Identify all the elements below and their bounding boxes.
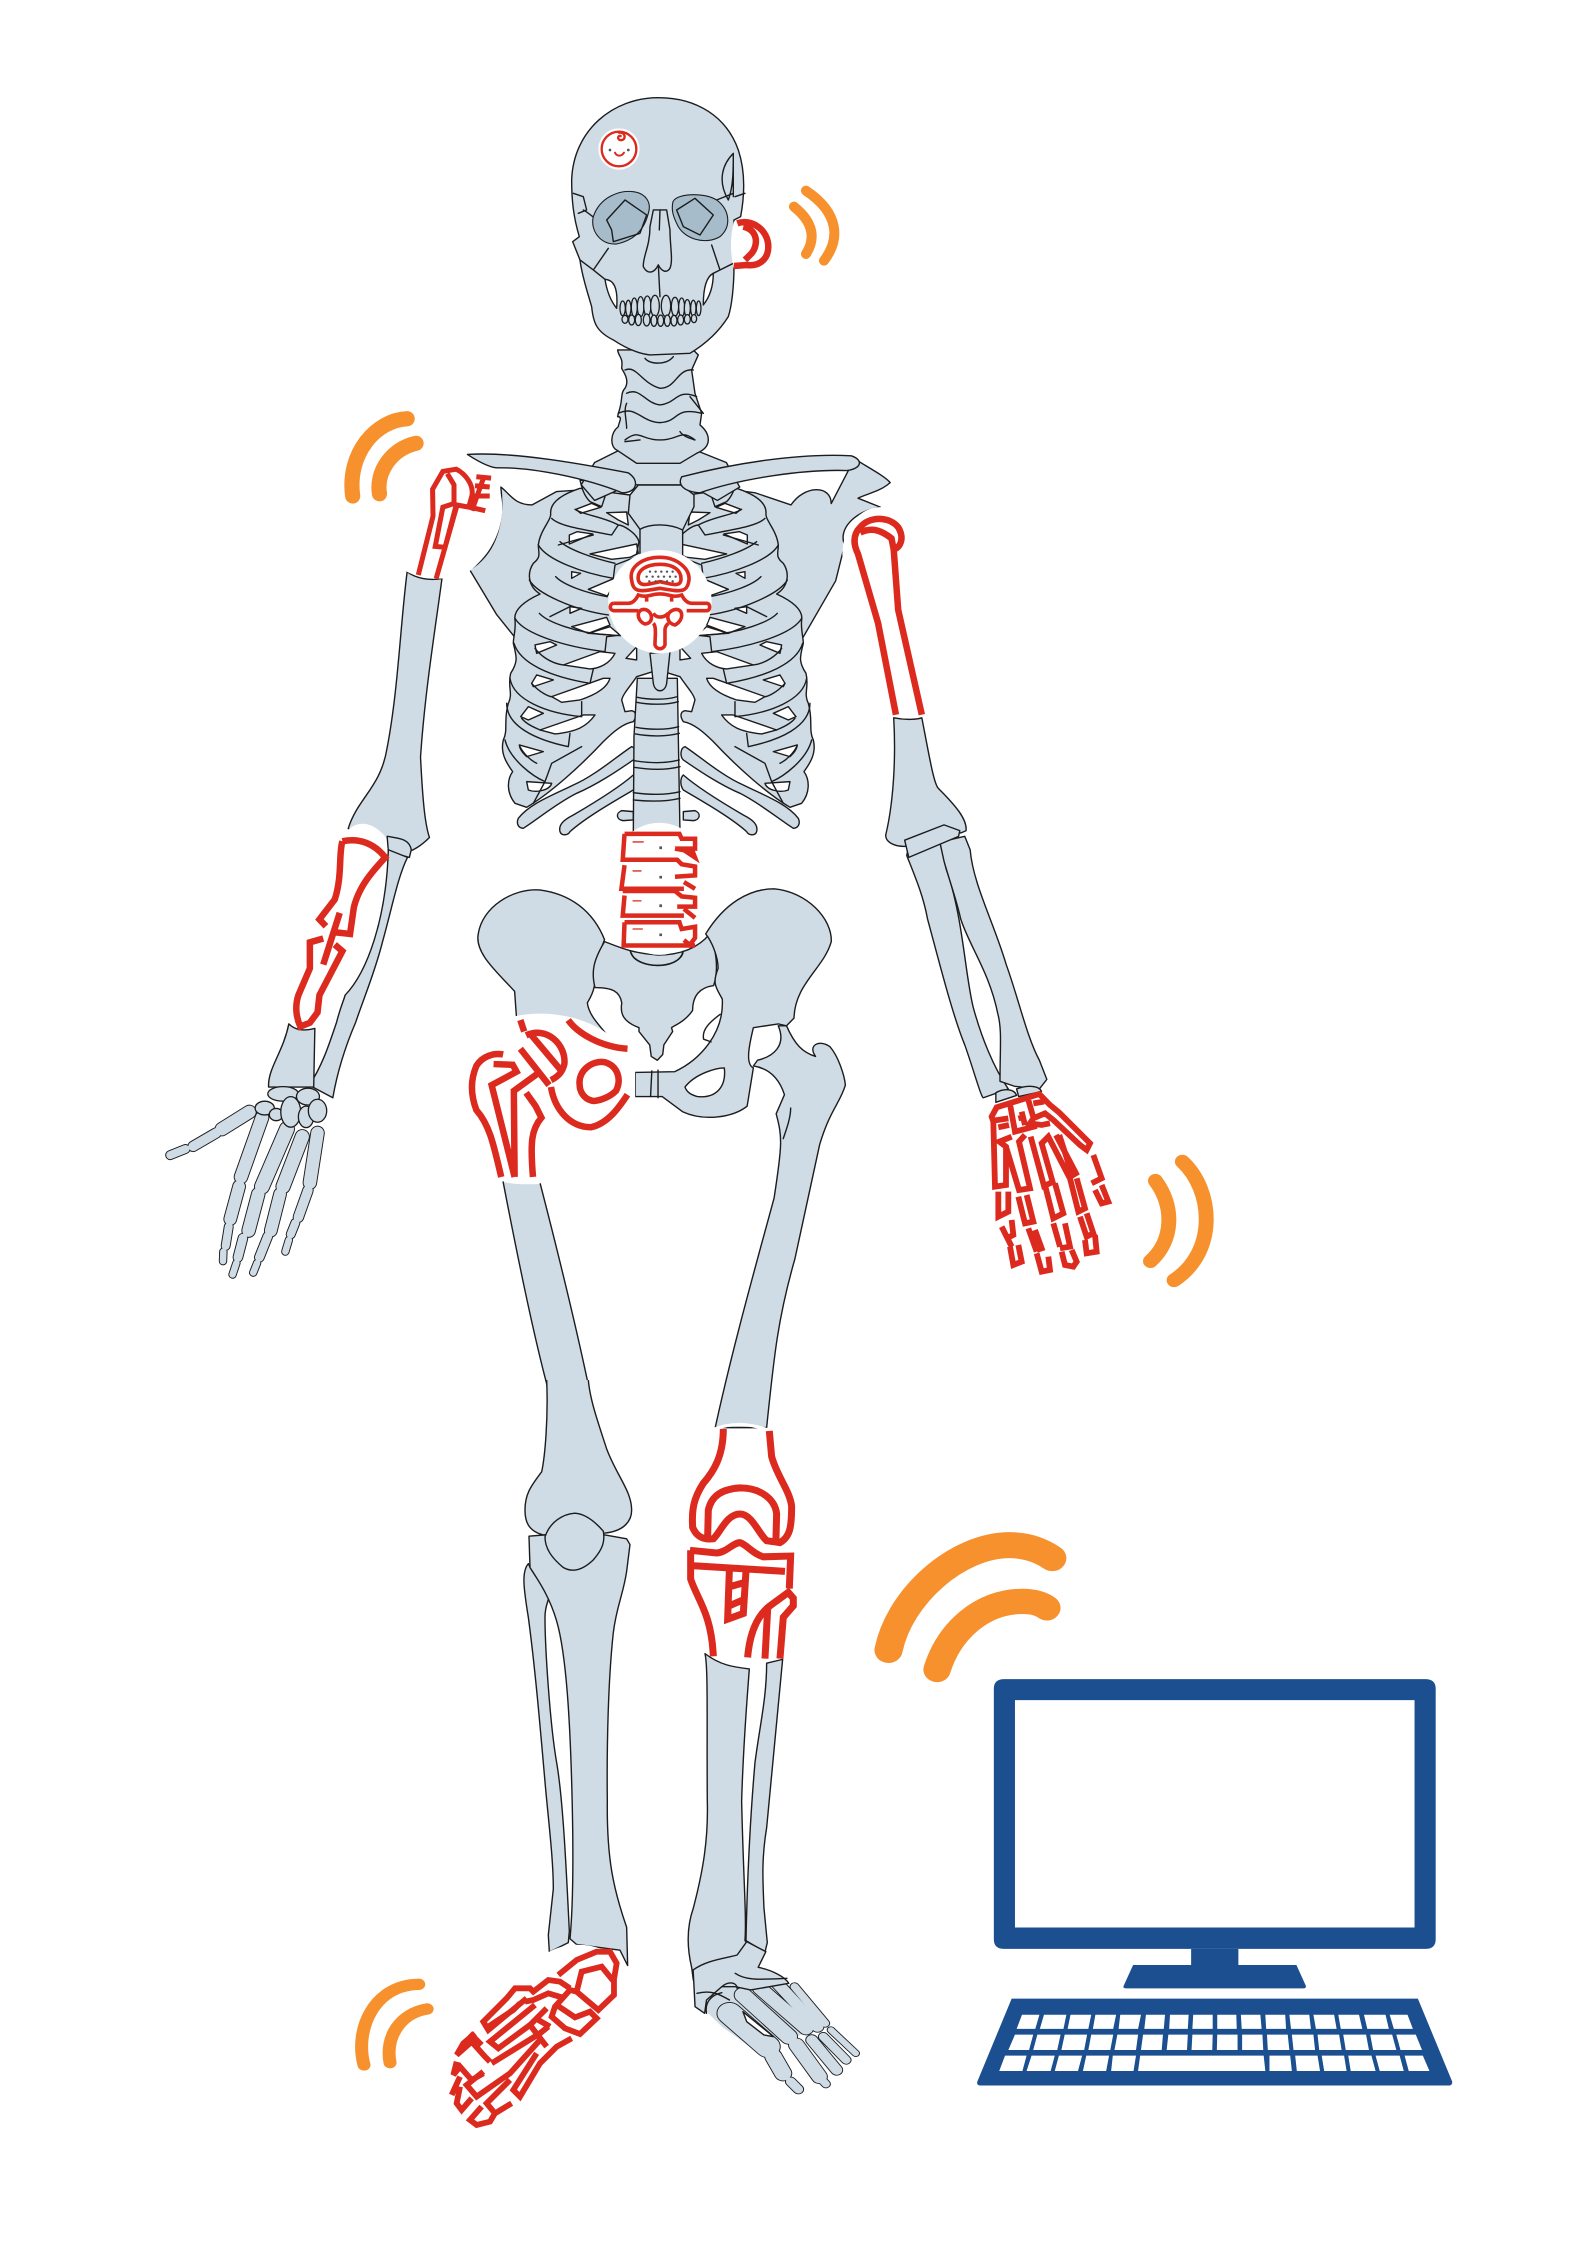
white mask left shoulder xyxy=(389,458,502,579)
right humerus lower xyxy=(886,718,966,846)
right radius xyxy=(907,842,1008,1098)
signal arcs: computer xyxy=(889,1545,1052,1670)
right ulna xyxy=(940,836,1047,1089)
signal arcs: left shoulder xyxy=(352,419,416,496)
left ulna xyxy=(309,850,407,1098)
right tibia xyxy=(688,1654,758,1980)
left hand xyxy=(170,1112,318,1275)
left patella xyxy=(545,1513,604,1570)
left ilium xyxy=(478,890,608,1037)
left forearm fracture implant xyxy=(296,840,385,1027)
sternum xyxy=(628,485,694,560)
knee implant xyxy=(690,1429,793,1659)
rib cage right half xyxy=(658,480,814,835)
skeleton: left arm xyxy=(170,572,442,1275)
lumbar vertebrae implant xyxy=(621,834,695,947)
right clavicle xyxy=(680,455,859,493)
thoracic vertebra implant xyxy=(610,557,710,649)
ear implant with blob xyxy=(731,220,768,268)
white mask for forearm xyxy=(260,824,388,1030)
left lower femur shaft and blob xyxy=(463,1014,635,1386)
upper vertebral base xyxy=(581,449,740,500)
skeleton: skull and neck xyxy=(572,98,834,463)
left femur shaft xyxy=(503,1182,588,1386)
sacral lower disc xyxy=(630,951,683,966)
right scapula xyxy=(729,458,890,639)
spine: thoracic and lumbar column xyxy=(633,678,680,833)
right hip bone xyxy=(635,889,831,1117)
elbow cap xyxy=(387,836,411,857)
left tibia xyxy=(529,1535,630,1966)
icon: baby face on skull xyxy=(598,128,640,170)
white mask lumbar xyxy=(606,823,713,955)
right elbow cap xyxy=(905,825,960,857)
right humerus shaft implant xyxy=(855,519,922,715)
signal arcs: ear xyxy=(794,191,834,261)
white mask for hip implant xyxy=(463,1014,635,1185)
skull details xyxy=(573,153,745,326)
white mask chest xyxy=(608,550,712,653)
hip implant xyxy=(472,1020,628,1177)
monitor xyxy=(994,1679,1436,1949)
skull xyxy=(572,98,744,355)
skeleton: left knee and shin xyxy=(524,1380,793,1980)
right hip bone and right femur xyxy=(635,889,845,1431)
sacrum and coccyx xyxy=(593,934,716,1060)
xiphoid process xyxy=(650,652,670,691)
right carpals small xyxy=(996,1086,1041,1102)
left femur lower xyxy=(525,1380,632,1535)
left shoulder implant xyxy=(418,469,491,579)
feet xyxy=(362,1942,856,2113)
left scapula xyxy=(470,487,590,637)
cervical vertebrae xyxy=(612,350,708,463)
monitor stand xyxy=(1123,1949,1306,1988)
skeleton: pelvis and left femur upper xyxy=(478,890,716,1060)
signal arcs: left foot xyxy=(362,1984,427,2065)
rib cage left half xyxy=(502,480,658,835)
right foot xyxy=(693,1942,856,2089)
left fibula xyxy=(524,1564,569,1952)
skeleton: right arm xyxy=(842,507,1206,1280)
signal arcs: right hand xyxy=(1150,1162,1206,1280)
white mask right shoulder xyxy=(842,507,918,601)
left clavicle xyxy=(467,454,636,493)
skeleton: torso xyxy=(467,449,890,835)
right femur xyxy=(715,1026,845,1428)
left foot implant xyxy=(452,1952,617,2125)
white mask left ankle xyxy=(435,1945,626,2113)
central masks and shoulder implant xyxy=(352,419,713,966)
keyboard xyxy=(977,1999,1452,2086)
left carpals xyxy=(255,1087,327,1128)
right fibula xyxy=(746,1659,783,1952)
left radius distal xyxy=(269,1024,315,1087)
right hand implant xyxy=(992,1094,1108,1272)
left humerus xyxy=(348,572,442,853)
computer xyxy=(977,1679,1452,2086)
